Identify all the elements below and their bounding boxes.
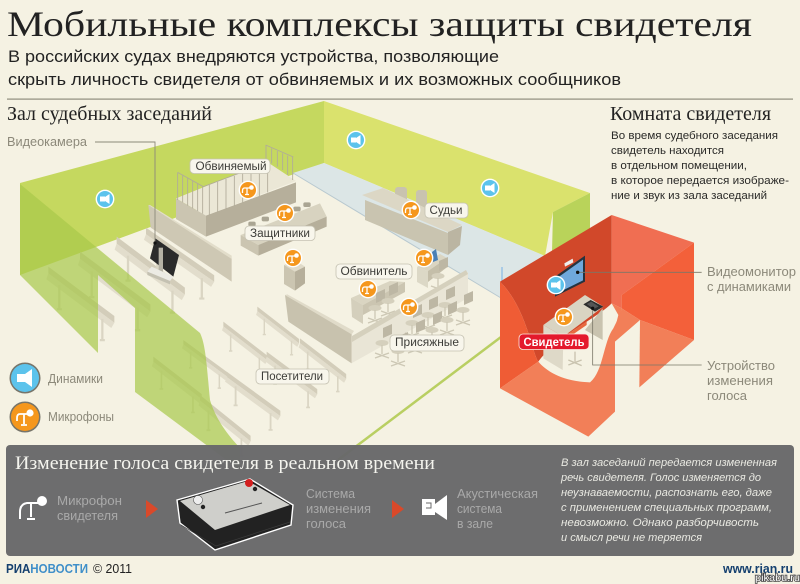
callout: voice changer: голоса [707,389,747,403]
judge chairs [395,187,427,210]
device photo [177,479,293,550]
prosecutor tables [351,249,448,324]
video monitor [555,256,585,297]
callout: video camera [7,135,157,245]
label: prosecutor [336,264,412,279]
subtitle: В российских судах внедряются устройства, позволяющие [8,47,499,66]
panel explanatory text: неузнаваемости, распознать его, даже [561,487,772,499]
step: voice changing system: голоса [306,517,346,531]
label: defenders: Защитники [250,228,310,240]
panel heading: Изменение голоса свидетеля в реальном времени [15,453,435,474]
panel explanatory text: речь свидетеля. Голос изменяется до [560,472,761,484]
icons: microphones [239,181,573,326]
step: voice changing system [306,487,371,531]
witness room description: ние и звук из зала заседаний [611,190,767,202]
back-left wall [500,215,612,362]
callout lines [578,272,702,365]
callout: voice changer: изменения [707,374,773,388]
witness room description [611,130,789,202]
label: prosecutor: Обвинитель [340,266,408,278]
witness desk [543,295,603,370]
witness room description: в отдельном помещении, [611,160,747,172]
courtroom furniture [46,145,354,456]
front courtroom wall, translucent [20,184,240,470]
panel explanatory text: с применением специальных программ, [561,502,772,514]
label: judges [425,203,468,218]
label: witness [519,334,589,350]
heading: courtroom: Зал судебных заседаний [7,104,212,125]
step: acoustic system: Акустическая [457,487,538,501]
step: acoustic system [457,487,538,531]
panel explanatory text: В зал заседаний передается измененная [561,457,777,469]
legend: microphones [10,402,114,432]
icon: microphone [20,496,47,519]
step: acoustic system: система [457,502,502,516]
step: witness microphone: свидетеля [57,509,118,523]
front benches [152,307,346,456]
witness room [500,215,702,437]
voice changer device [583,300,603,312]
footer: agency logo: © 2011 [93,561,132,576]
callout: video camera: Видеокамера [7,135,87,149]
subtitle: скрыть личность свидетеля от обвиняемых и их возможных сообщников [8,70,621,89]
defence table [241,202,327,256]
legend: speakers: Динамики [48,372,103,386]
callout: video monitor [707,265,796,294]
label: witness: Свидетель [524,337,584,349]
callout: video monitor: с динамиками [707,280,791,294]
step: voice changing system: изменения [306,502,371,516]
watermark: pikabu.ru [755,572,800,584]
defendant dock [176,145,296,237]
label: defendant: Обвиняемый [196,161,266,173]
heading: witness room: Комната свидетеля [610,104,771,125]
rear benches [46,228,214,340]
label: defenders [245,226,315,240]
witness room description: свидетель находится [611,145,724,157]
jury stands [352,270,473,366]
panel explanatory text: и смысл речи не теряется [561,532,702,544]
arrow [392,500,404,518]
icon: speaker [422,495,447,520]
step: witness microphone: Микрофон [57,494,122,508]
step: voice changing system: Система [306,487,355,501]
courtroom walls and floor [20,101,590,460]
partition [148,205,232,282]
step: acoustic system: в зале [457,517,493,531]
icons: speakers [96,131,565,294]
callout: video monitor: Видеомонитор [707,265,796,279]
subtitle [8,47,621,89]
witness room description: Во время судебного заседания [611,130,778,142]
label: visitors [256,369,329,384]
panel explanatory text: невозможно. Однако разборчивость [561,517,759,529]
label: visitors: Посетители [261,371,323,383]
legend: microphones: Микрофоны [48,410,114,424]
label: judges: Судьи [430,205,462,217]
video camera [147,238,179,284]
label: jurors [390,335,464,351]
witness room description: в которое передается изображе- [611,175,789,187]
label: jurors: Присяжные [395,337,459,349]
right wall [622,243,694,340]
callout: voice changer: Устройство [707,359,775,373]
judges table [362,188,462,255]
callout: voice changer [707,359,775,403]
panel explanatory text [560,457,777,544]
witness room floor [500,308,640,437]
footer: website: www.rian.ru [722,561,793,576]
right wall upper [612,215,694,308]
jury barrier [285,294,354,363]
left wall [500,282,538,388]
arrow [146,500,158,518]
step: witness microphone [57,494,122,523]
panel: real-time voice change [6,445,794,556]
title: Мобильные комплексы защиты свидетеля [7,4,752,44]
legend: speakers [10,362,103,394]
podium [284,260,305,291]
right wall lower [639,320,694,387]
footer: agency logo: РИАНОВОСТИ [6,561,88,576]
judges table, prosecutor table and jury [351,187,473,366]
